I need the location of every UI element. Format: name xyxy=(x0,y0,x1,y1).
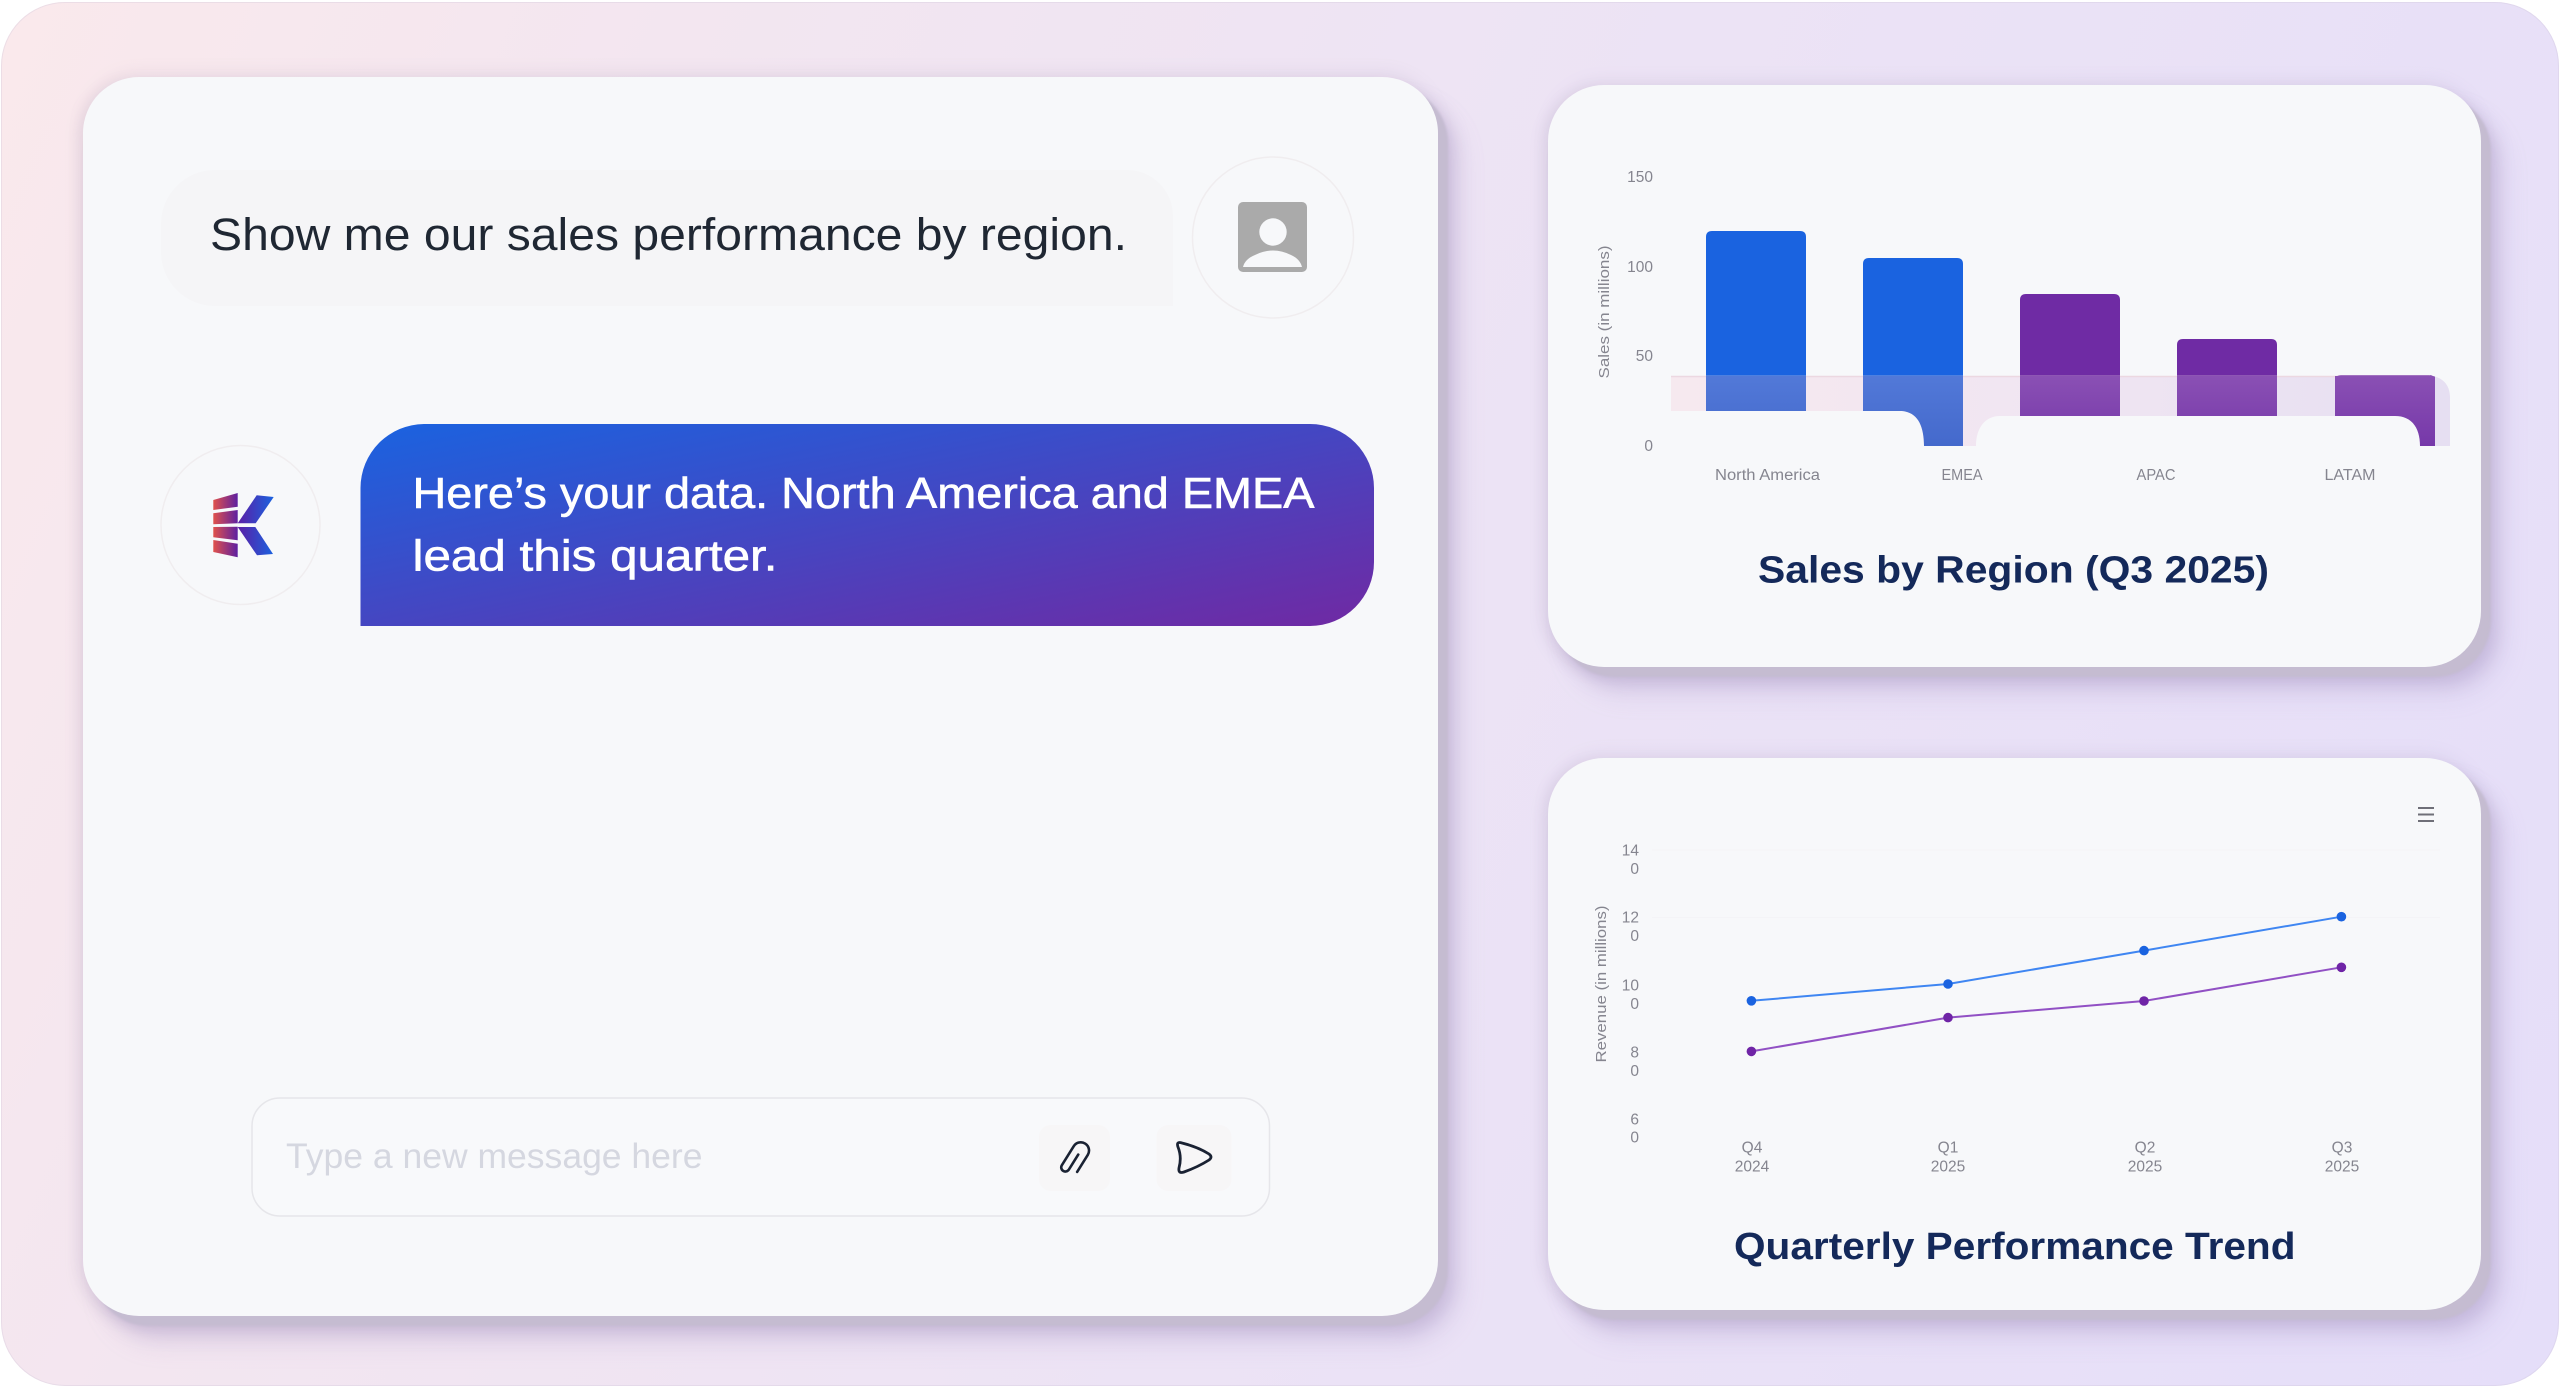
icon: send arrow xyxy=(1156,1125,1232,1191)
y axis labels: 150 xyxy=(1627,169,1653,186)
x axis labels: 2024 xyxy=(1735,1158,1770,1176)
icon: chart menu xyxy=(2418,808,2434,821)
y axis labels: 0 xyxy=(1630,861,1639,878)
assistant message bubble xyxy=(360,424,1374,626)
y axis labels: 0 xyxy=(1630,1063,1639,1080)
user message bubble xyxy=(161,170,1173,306)
y axis labels: 10 xyxy=(1622,978,1639,994)
x axis labels: Q4 xyxy=(1742,1140,1763,1156)
y axis labels: 12 xyxy=(1622,910,1639,926)
grid lines xyxy=(1652,850,2440,918)
x axis labels: 2025 xyxy=(2325,1158,2359,1176)
chart title: Sales by Region (Q3 2025) xyxy=(1758,550,2269,592)
y axis labels: 14 xyxy=(1622,842,1639,860)
y axis labels: 6 xyxy=(1630,1112,1639,1128)
y axis labels: 100 xyxy=(1627,259,1653,276)
y axis labels: 0 xyxy=(1644,438,1653,455)
y axis labels: 0 xyxy=(1630,928,1639,945)
assistant message bubble: Here’s your data. North America and EMEA xyxy=(412,469,1315,518)
y axis labels xyxy=(1622,842,1639,1146)
icon: user avatar xyxy=(1192,157,1354,318)
y axis title: Sales (in millions) xyxy=(1597,246,1613,378)
x axis labels: Q2 xyxy=(2135,1140,2155,1156)
message input box xyxy=(252,1098,1270,1216)
panel: sales by region chart xyxy=(1548,85,2481,666)
y axis labels: 50 xyxy=(1636,348,1653,365)
x axis labels: North America xyxy=(1715,467,1820,484)
x axis labels: APAC xyxy=(2136,467,2176,484)
assistant message bubble: lead this quarter. xyxy=(412,532,778,580)
x axis labels xyxy=(1735,1140,2359,1176)
line chart: blue series xyxy=(1747,912,2346,1006)
user message bubble: Show me our sales performance by region. xyxy=(210,209,1127,260)
y axis labels: 0 xyxy=(1630,996,1639,1013)
y axis labels: 8 xyxy=(1630,1044,1639,1062)
x axis labels: EMEA xyxy=(1942,467,1983,484)
x axis labels: Q1 xyxy=(1938,1140,1958,1156)
icon: assistant logo xyxy=(161,446,320,604)
y axis labels: 0 xyxy=(1630,1130,1639,1146)
x axis labels: 2025 xyxy=(2128,1158,2162,1176)
x axis labels: Q3 xyxy=(2332,1140,2352,1156)
y axis labels xyxy=(1627,169,1653,455)
panel: quarterly trend chart xyxy=(1548,758,2481,1310)
x axis labels: 2025 xyxy=(1931,1158,1965,1176)
line chart: purple series xyxy=(1747,962,2346,1056)
message input box: Type a new message here xyxy=(286,1137,702,1176)
y axis title: Revenue (in millions) xyxy=(1594,906,1610,1062)
x axis labels xyxy=(1715,467,2376,484)
chart title: Quarterly Performance Trend xyxy=(1734,1226,2296,1268)
panel: chat window xyxy=(83,77,1438,1316)
icon: attach paperclip xyxy=(1039,1125,1110,1191)
bar chart xyxy=(1671,231,2450,446)
x axis labels: LATAM xyxy=(2324,467,2376,484)
